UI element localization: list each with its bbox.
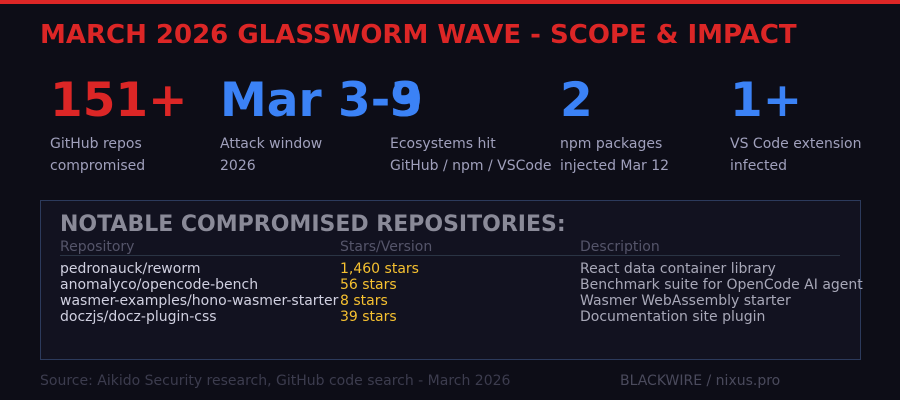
stat: ecosystems [390, 73, 551, 174]
table rows: 1,460 stars [340, 261, 419, 277]
title: MARCH 2026 GLASSWORM WAVE - SCOPE & IMPACT [40, 20, 797, 50]
table header: Description [580, 239, 660, 255]
stat: npm [560, 73, 669, 174]
stat: vscode: infected [730, 158, 787, 174]
table header: Repository [60, 239, 134, 255]
table rows: Documentation site plugin [580, 309, 765, 325]
table rows: Benchmark suite for OpenCode AI agent [580, 277, 863, 293]
table rows: 39 stars [340, 309, 397, 325]
stat: ecosystems: GitHub / npm / VSCode [390, 158, 551, 174]
stat: attack window: 2026 [220, 158, 256, 174]
stat: attack window [220, 73, 423, 174]
table rows: 8 stars [340, 293, 388, 309]
table rows: React data container library [580, 261, 776, 277]
stat: repos: GitHub repos [50, 136, 142, 152]
stat: vscode [730, 73, 861, 174]
footer brand: BLACKWIRE / nixus.pro [620, 373, 780, 389]
stat: repos: compromised [50, 158, 145, 174]
stat: npm: 2 [560, 73, 593, 128]
table rows: 56 stars [340, 277, 397, 293]
panel: notable repositories [40, 200, 863, 360]
table rows: doczjs/docz-plugin-css [60, 309, 217, 325]
stat: repos: 151+ [50, 73, 188, 128]
stat: attack window: Attack window [220, 136, 322, 152]
table header: Stars/Version [340, 239, 432, 255]
panel heading: NOTABLE COMPROMISED REPOSITORIES: [60, 212, 566, 237]
table rows: Wasmer WebAssembly starter [580, 293, 791, 309]
stat: ecosystems: Ecosystems hit [390, 136, 496, 152]
stat: npm: npm packages [560, 136, 662, 152]
table rows: pedronauck/reworm [60, 261, 200, 277]
stat: ecosystems: 3 [390, 73, 423, 128]
stat: attack window: Mar 3-9 [220, 73, 423, 128]
table header [60, 239, 660, 255]
table rows [60, 261, 863, 325]
stat: vscode: 1+ [730, 73, 802, 128]
table rows: anomalyco/opencode-bench [60, 277, 258, 293]
stat: repos [50, 73, 188, 174]
table rows: wasmer-examples/hono-wasmer-starter [60, 293, 339, 309]
stat: npm: injected Mar 12 [560, 158, 669, 174]
footer source: Source: Aikido Security research, GitHub code search - March 2026 [40, 373, 511, 389]
stat: vscode: VS Code extension [730, 136, 861, 152]
